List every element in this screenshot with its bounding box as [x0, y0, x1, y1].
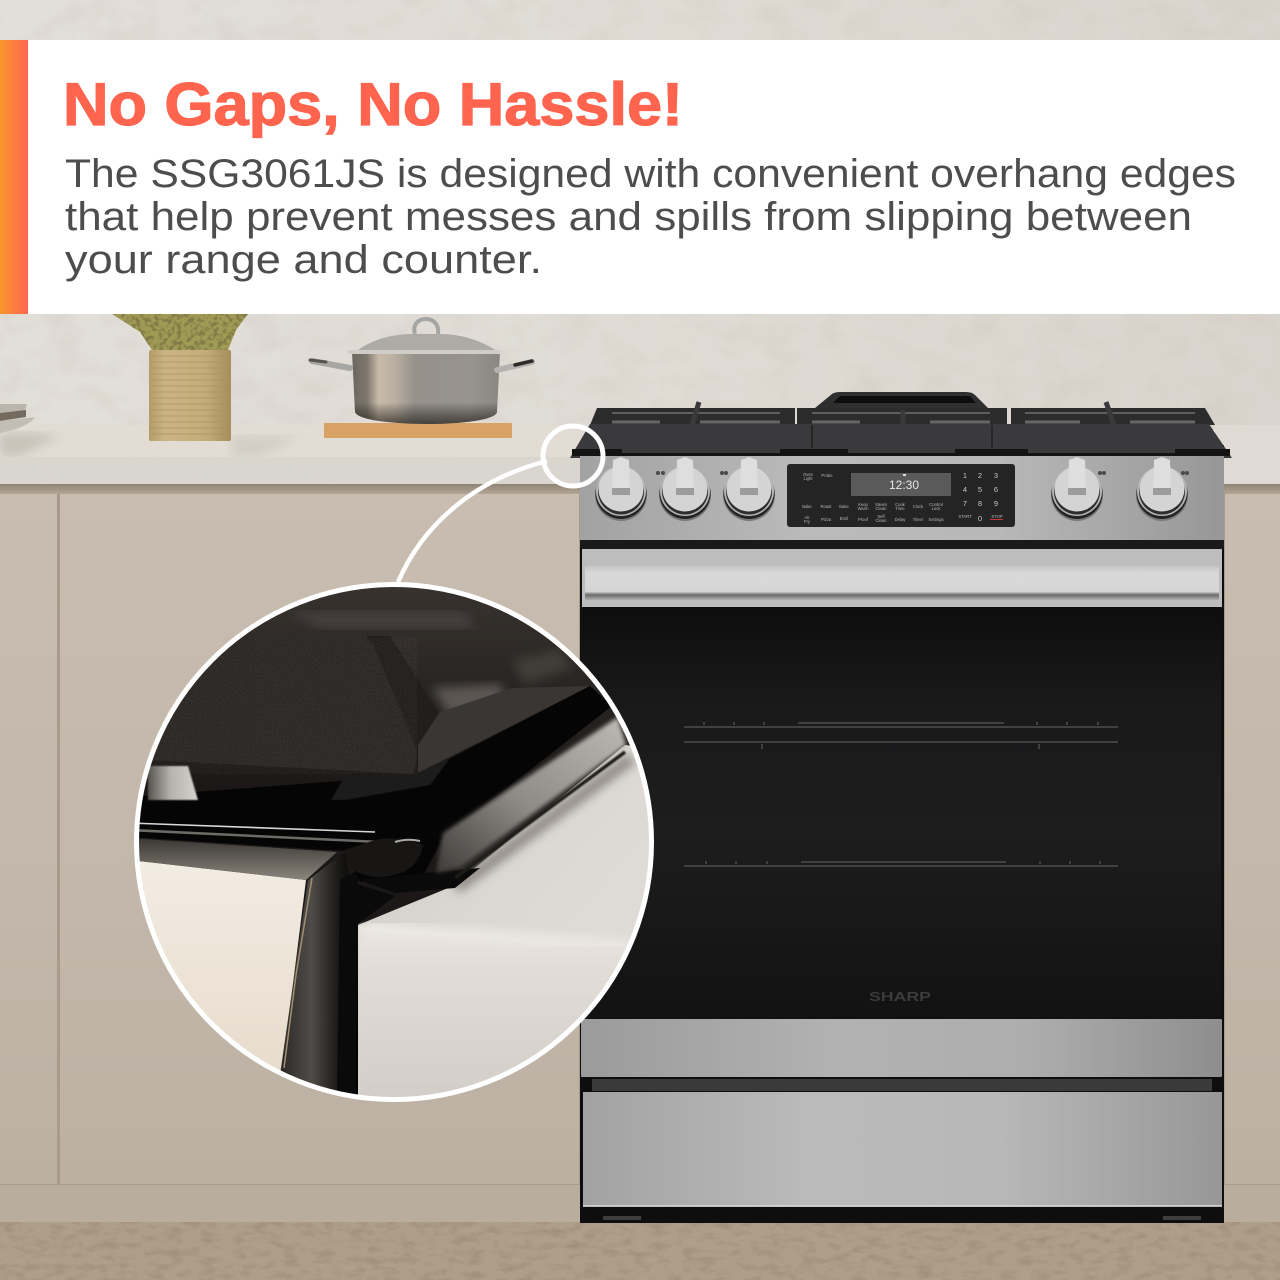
griddle handle: [815, 392, 988, 408]
control display: Clock: [913, 504, 924, 509]
control display: Clean: [876, 518, 887, 523]
description text: that help prevent messes and spills from slipping between: [65, 195, 1192, 239]
control display: Lock: [932, 506, 941, 511]
control display: 12:30: [889, 478, 919, 492]
control display: Clean: [876, 506, 887, 511]
stainless side panel: [130, 838, 337, 1072]
control display: Roast: [821, 504, 832, 509]
control display: Warm: [857, 506, 869, 511]
control display: Delay: [895, 517, 906, 522]
control display: Probe: [821, 473, 833, 478]
control panel: [580, 456, 1224, 541]
control display: Steam: [875, 502, 888, 507]
floor: [0, 1222, 1280, 1280]
control display: 8: [978, 499, 982, 508]
SHARP logo: SHARP: [869, 989, 931, 1004]
control display: 5: [978, 485, 982, 494]
oven racks: [684, 722, 1118, 866]
control display: Timer: [913, 517, 924, 522]
oven door glass: [581, 607, 1221, 1019]
control display: Pizza: [821, 517, 832, 522]
control display: Fry: [804, 519, 811, 524]
inset white ring: [136, 584, 652, 1100]
control display: Settings: [928, 517, 944, 522]
control display: 4: [963, 485, 967, 494]
control display: Proof: [858, 517, 869, 522]
lower trim panel: [581, 1019, 1222, 1077]
control display: Broil: [840, 516, 848, 521]
connector line to zoom circle: [398, 461, 547, 582]
plant in gold vase: [110, 314, 250, 441]
control display: 2: [978, 471, 982, 480]
glossy black overhang: [130, 686, 626, 893]
storage drawer: [583, 1092, 1222, 1207]
control display: 0: [978, 514, 982, 523]
control display: STOP: [991, 514, 1003, 519]
control display: Air: [804, 515, 810, 520]
upper grate blur: [240, 587, 616, 773]
control display: Light: [803, 476, 813, 481]
black gap and trim: [280, 852, 395, 1100]
description text: The SSG3061JS is designed with convenient overhang edges: [65, 152, 1236, 196]
description text: [65, 152, 1236, 282]
description text: your range and counter.: [65, 238, 542, 282]
range: slide-in stove: [570, 392, 1232, 1223]
cooktop front edge: [570, 424, 1232, 458]
burner indicator icons: [656, 471, 1189, 475]
range body: [580, 445, 1224, 1223]
countertop: [0, 425, 1280, 494]
control display: 7: [963, 499, 967, 508]
control display: Oven: [803, 472, 814, 477]
control display: Self: [877, 514, 885, 519]
stock pot on cutting board: [310, 319, 532, 438]
cooktop grates: [590, 402, 1215, 425]
orange accent bar: [0, 40, 28, 314]
control display: 3: [994, 471, 998, 480]
plates: [0, 404, 35, 433]
small circle marking range corner: [543, 426, 603, 486]
kitchen wall background: [0, 0, 1280, 430]
oven door handle: [582, 549, 1222, 607]
control display: 6: [994, 485, 998, 494]
reflection highlight: [148, 766, 198, 800]
knobs: [595, 457, 1188, 521]
title: No Gaps, No Hassle!: [63, 71, 683, 138]
feet: [603, 1216, 1201, 1220]
control display: 9: [994, 499, 998, 508]
steel edge glints: [284, 878, 312, 1068]
control display: Bake: [839, 504, 849, 509]
control display: Time: [895, 506, 905, 511]
control display: [787, 464, 1015, 527]
control display: Control: [929, 502, 943, 507]
control display: Cook: [895, 502, 906, 507]
control display: 1: [963, 471, 967, 480]
zoomed inset: overhang edge detail: [120, 580, 670, 1110]
control display: Keep: [858, 502, 869, 507]
header banner: [0, 40, 1280, 314]
control display: Bake: [802, 504, 812, 509]
control display: START: [958, 514, 972, 519]
counter surface: [358, 745, 649, 1097]
cabinets: [0, 494, 1280, 1224]
textured burner cap: [120, 637, 417, 774]
